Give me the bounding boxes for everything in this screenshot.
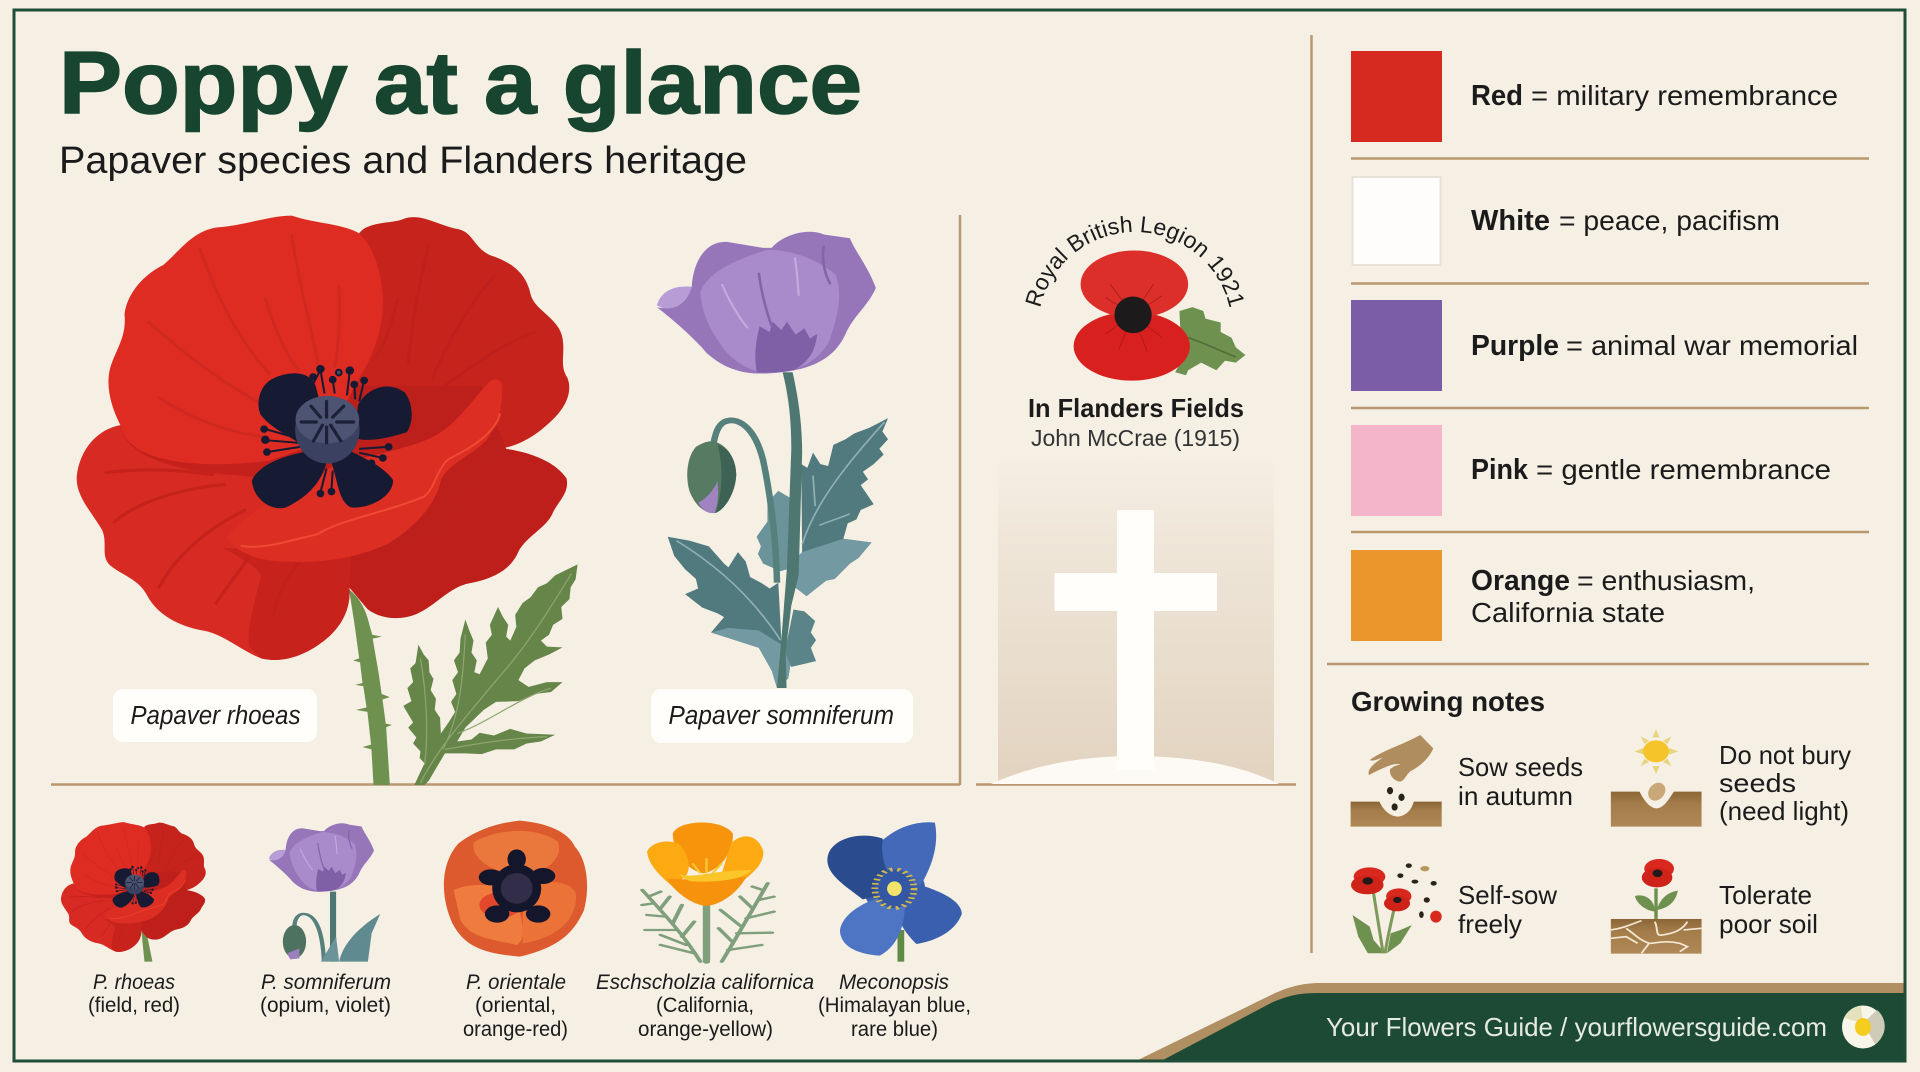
- legend: red: [1351, 51, 1838, 142]
- stem: [777, 372, 802, 688]
- flower head: [77, 216, 569, 660]
- panel: colour meaning legend: [1351, 51, 1858, 641]
- species: P. rhoeas: (field, red): [88, 993, 180, 1017]
- legend: red: Red: [1471, 80, 1523, 112]
- species label: Papaver somniferum: [651, 689, 913, 743]
- legend: red: = military remembrance: [1531, 80, 1838, 111]
- species: P. somniferum: (opium, violet): [260, 993, 391, 1017]
- legend: orange: California state: [1471, 597, 1665, 628]
- fern leaf: [403, 564, 578, 785]
- footer band: [1138, 983, 1905, 1060]
- poem author: John McCrae (1915): [1031, 425, 1240, 451]
- poem title: In Flanders Fields: [1028, 393, 1244, 423]
- legend: pink: Pink: [1471, 454, 1528, 486]
- panel: Papaver somniferum illustration: [651, 232, 913, 743]
- upper leaf: [787, 418, 888, 596]
- memorial cross scene: [991, 455, 1279, 784]
- lower leaves: [668, 537, 791, 688]
- species: Eschscholzia californica: orange-yellow): [638, 1017, 773, 1041]
- species: Eschscholzia californica: (California,: [656, 993, 754, 1017]
- legend: orange: = enthusiasm,: [1577, 565, 1755, 596]
- legend: purple: Purple: [1471, 330, 1559, 362]
- panel: Papaver rhoeas illustration: [77, 216, 578, 785]
- species: Meconopsis: rare blue): [851, 1017, 938, 1041]
- note: self-sow freely: freely: [1458, 909, 1522, 939]
- species label: Papaver somniferum: Papaver somniferum: [668, 702, 894, 730]
- note: tolerate poor soil: poor soil: [1719, 909, 1818, 939]
- species: Meconopsis: (Himalayan blue,: [818, 993, 971, 1017]
- species: P. somniferum: P. somniferum: [261, 970, 391, 994]
- note: self-sow freely: Self-sow: [1458, 880, 1557, 910]
- legend: orange: Orange: [1471, 565, 1570, 597]
- legend: pink: = gentle remembrance: [1536, 454, 1831, 485]
- note: sow seeds: in autumn: [1458, 781, 1573, 811]
- note: sow seeds: Sow seeds: [1458, 752, 1583, 782]
- note: do not bury seeds: (need light): [1719, 796, 1849, 826]
- species: P. rhoeas: [61, 822, 206, 1017]
- note: do not bury seeds: Do not bury: [1719, 740, 1851, 770]
- note: tolerate poor soil: Tolerate: [1719, 880, 1812, 910]
- panel: remembrance and Flanders heritage: [991, 216, 1279, 784]
- species label: Papaver rhoeas: [113, 689, 317, 742]
- note: self-sow freely: [1351, 863, 1557, 953]
- legend: purple: = animal war memorial: [1566, 330, 1858, 361]
- growing notes heading: Growing notes: [1351, 686, 1545, 717]
- legend: orange: [1351, 550, 1755, 641]
- panel: growing notes: [1351, 686, 1851, 954]
- legend: white: [1352, 177, 1780, 265]
- panel: related poppy species row: [61, 821, 971, 1041]
- bud stalk: [713, 420, 777, 583]
- subtitle: Papaver species and Flanders heritage: [59, 140, 747, 182]
- legend: white: = peace, pacifism: [1559, 205, 1780, 236]
- species: P. somniferum: [260, 823, 391, 1017]
- note: tolerate poor soil: [1611, 859, 1818, 954]
- species: Meconopsis: Meconopsis: [839, 970, 949, 994]
- species: P. orientale: (oriental,: [475, 993, 556, 1017]
- legend: white: White: [1471, 205, 1550, 237]
- species label: Papaver rhoeas: Papaver rhoeas: [130, 702, 301, 730]
- stem with thorns: [349, 589, 392, 785]
- remembrance poppy emblem: [1074, 251, 1245, 381]
- note: do not bury seeds: seeds: [1719, 768, 1796, 798]
- species: P. orientale: P. orientale: [466, 970, 566, 994]
- title: Poppy at a glance: [59, 33, 862, 132]
- species: Eschscholzia californica: Eschscholzia californica: [596, 970, 814, 994]
- species: P. orientale: orange-red): [463, 1017, 568, 1041]
- note: sow seeds: [1351, 735, 1583, 827]
- legend: pink: [1351, 425, 1831, 516]
- Royal British Legion arc text: Royal British Legion 1921: [1025, 216, 1244, 308]
- purple flower head: [657, 232, 876, 374]
- note: do not bury seeds: [1611, 729, 1851, 827]
- footer logo: [1842, 1006, 1885, 1048]
- footer text: Your Flowers Guide / yourflowersguide.com: [1326, 1012, 1827, 1042]
- species: P. rhoeas: P. rhoeas: [93, 970, 175, 994]
- species: Eschscholzia californica: [596, 822, 814, 1041]
- species: P. orientale: [444, 821, 587, 1041]
- legend: purple: [1351, 300, 1858, 391]
- species: Meconopsis: [818, 822, 971, 1041]
- bud: [687, 441, 736, 513]
